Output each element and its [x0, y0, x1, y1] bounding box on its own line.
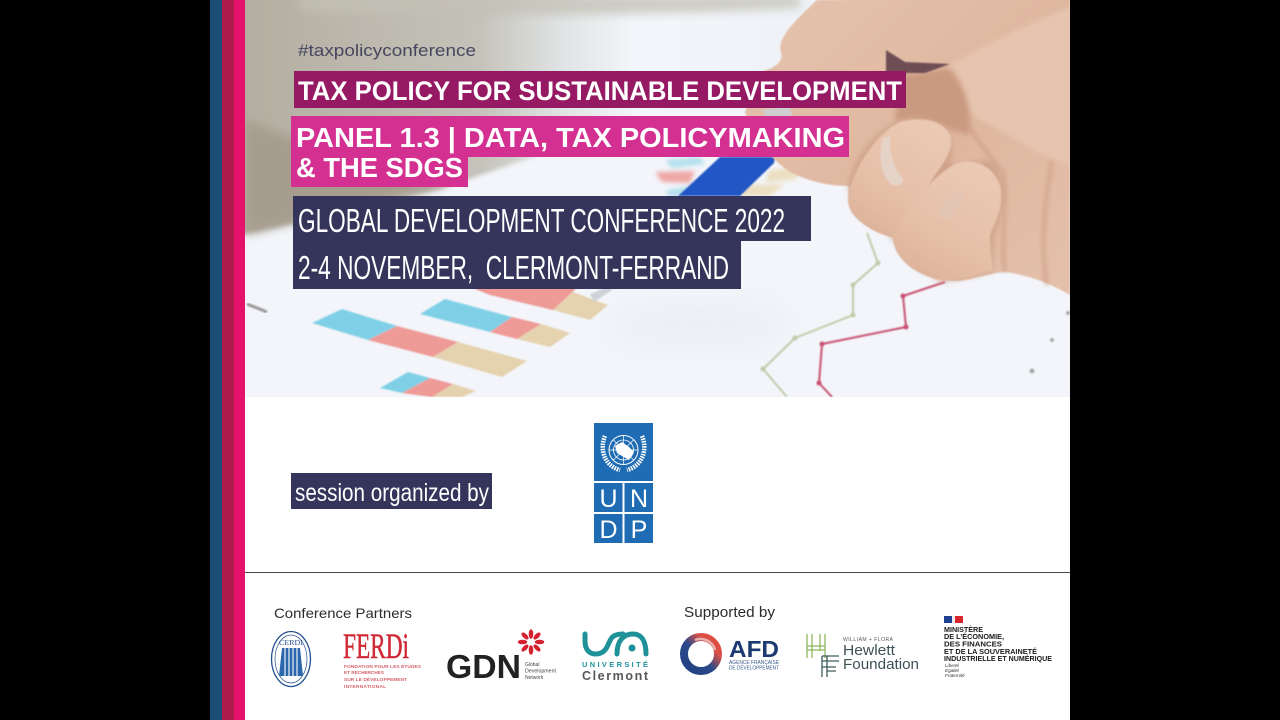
logo: French ministry: MINISTÈRE [944, 625, 983, 634]
panel title banner: PANEL 1.3 | DATA, TAX POLICYMAKING [296, 122, 845, 153]
logo: French ministry: DES FINANCES [944, 640, 1002, 648]
logo: French ministry [944, 616, 1052, 678]
logo: GDN [446, 629, 557, 685]
logo: GDN: GDN [446, 648, 521, 685]
photo: bar chart on paper [312, 285, 608, 397]
logo: UNDP: D [599, 516, 618, 544]
session organizer label: session organized by [295, 479, 489, 507]
logo: Hewlett Foundation [807, 634, 919, 677]
logo: French ministry: INDUSTRIELLE ET NUMÉRIQUE [944, 654, 1052, 663]
photo: blurred distant bars [655, 157, 805, 196]
photo: soft shadow on paper [610, 303, 790, 347]
photo: finger nails [880, 136, 903, 186]
logo: UNDP: N [630, 485, 648, 513]
logo: AFD: DE DÉVELOPPEMENT [729, 664, 779, 672]
logo: FERDI: SUR LE DÉVELOPPEMENT [344, 675, 407, 683]
logo: FERDI: ET RECHERCHES [344, 670, 385, 676]
logo: Université Clermont [582, 634, 649, 683]
logo: FERDI: FERDi [343, 626, 409, 666]
logo: UNDP [594, 423, 653, 544]
logo: French ministry: DE L’ÉCONOMIE, [944, 632, 1004, 641]
logo: FERDI [343, 626, 422, 690]
logo: French ministry: Égalité [945, 667, 959, 673]
photo: second finger [848, 119, 951, 237]
logo: UNDP: U [599, 485, 618, 513]
conference name and date banner [293, 196, 811, 289]
logo: GDN: Network [525, 675, 544, 681]
photo: third finger [893, 161, 1001, 280]
logo: FERDI: FONDATION POUR LES ÉTUDES [344, 662, 422, 670]
logo: CERDI [272, 632, 310, 686]
panel title banner: & THE SDGS [296, 152, 463, 183]
logo: AFD: AGENCE FRANÇAISE [729, 660, 780, 666]
photo: pen [590, 157, 775, 302]
logo: Université Clermont: UNIVERSITÉ [582, 660, 648, 669]
logo: FERDI: INTERNATIONAL [344, 684, 386, 690]
logo: GDN: Development [525, 668, 557, 674]
logo: French ministry: ET DE LA SOUVERAINETÉ [944, 647, 1037, 656]
divider [245, 572, 1070, 573]
photo: desk [225, 0, 830, 238]
photo: knuckle creases [968, 125, 1052, 285]
logo: CERDI: CERDI [279, 639, 304, 647]
title banner: TAX POLICY FOR SUSTAINABLE DEVELOPMENT [298, 76, 902, 106]
logo: French ministry: Liberté [945, 663, 959, 668]
photo: hand drawing on charts [225, 0, 1075, 397]
white slide [245, 0, 1070, 720]
logo: UNDP: P [631, 516, 647, 544]
logo: French ministry: Fraternité [945, 673, 965, 678]
photo: lit top of hand [945, 5, 1075, 165]
photo: finger shadows [848, 118, 1003, 283]
photo: shaded palm hollow [895, 68, 970, 135]
decorative side stripes [210, 0, 245, 720]
logo: Hewlett Foundation: Hewlett [843, 642, 896, 659]
conference name and date banner: GLOBAL DEVELOPMENT CONFERENCE 2022 [298, 202, 785, 239]
photo: line charts [760, 233, 1070, 397]
logo: Hewlett Foundation: WILLIAM + FLORA [843, 637, 894, 643]
session organizer label [291, 473, 492, 509]
hashtag: #taxpolicyconference [298, 41, 476, 60]
photo: hand [745, 0, 1075, 295]
logo: Université Clermont: Clermont [582, 669, 649, 683]
conference name and date banner: 2-4 NOVEMBER, CLERMONT-FERRAND [298, 249, 729, 286]
panel title banner [291, 116, 849, 187]
logo: GDN: Global [525, 662, 539, 668]
logo: AFD: AFD [729, 636, 779, 662]
logo: Hewlett Foundation: Foundation [843, 656, 919, 673]
heading: conference partners: Conference Partners [274, 605, 412, 621]
photo: blurred text on paper [247, 304, 267, 312]
heading: supported by: Supported by [684, 605, 776, 621]
photo: pen barrel in grip [886, 50, 950, 73]
logo: AFD [684, 636, 780, 672]
